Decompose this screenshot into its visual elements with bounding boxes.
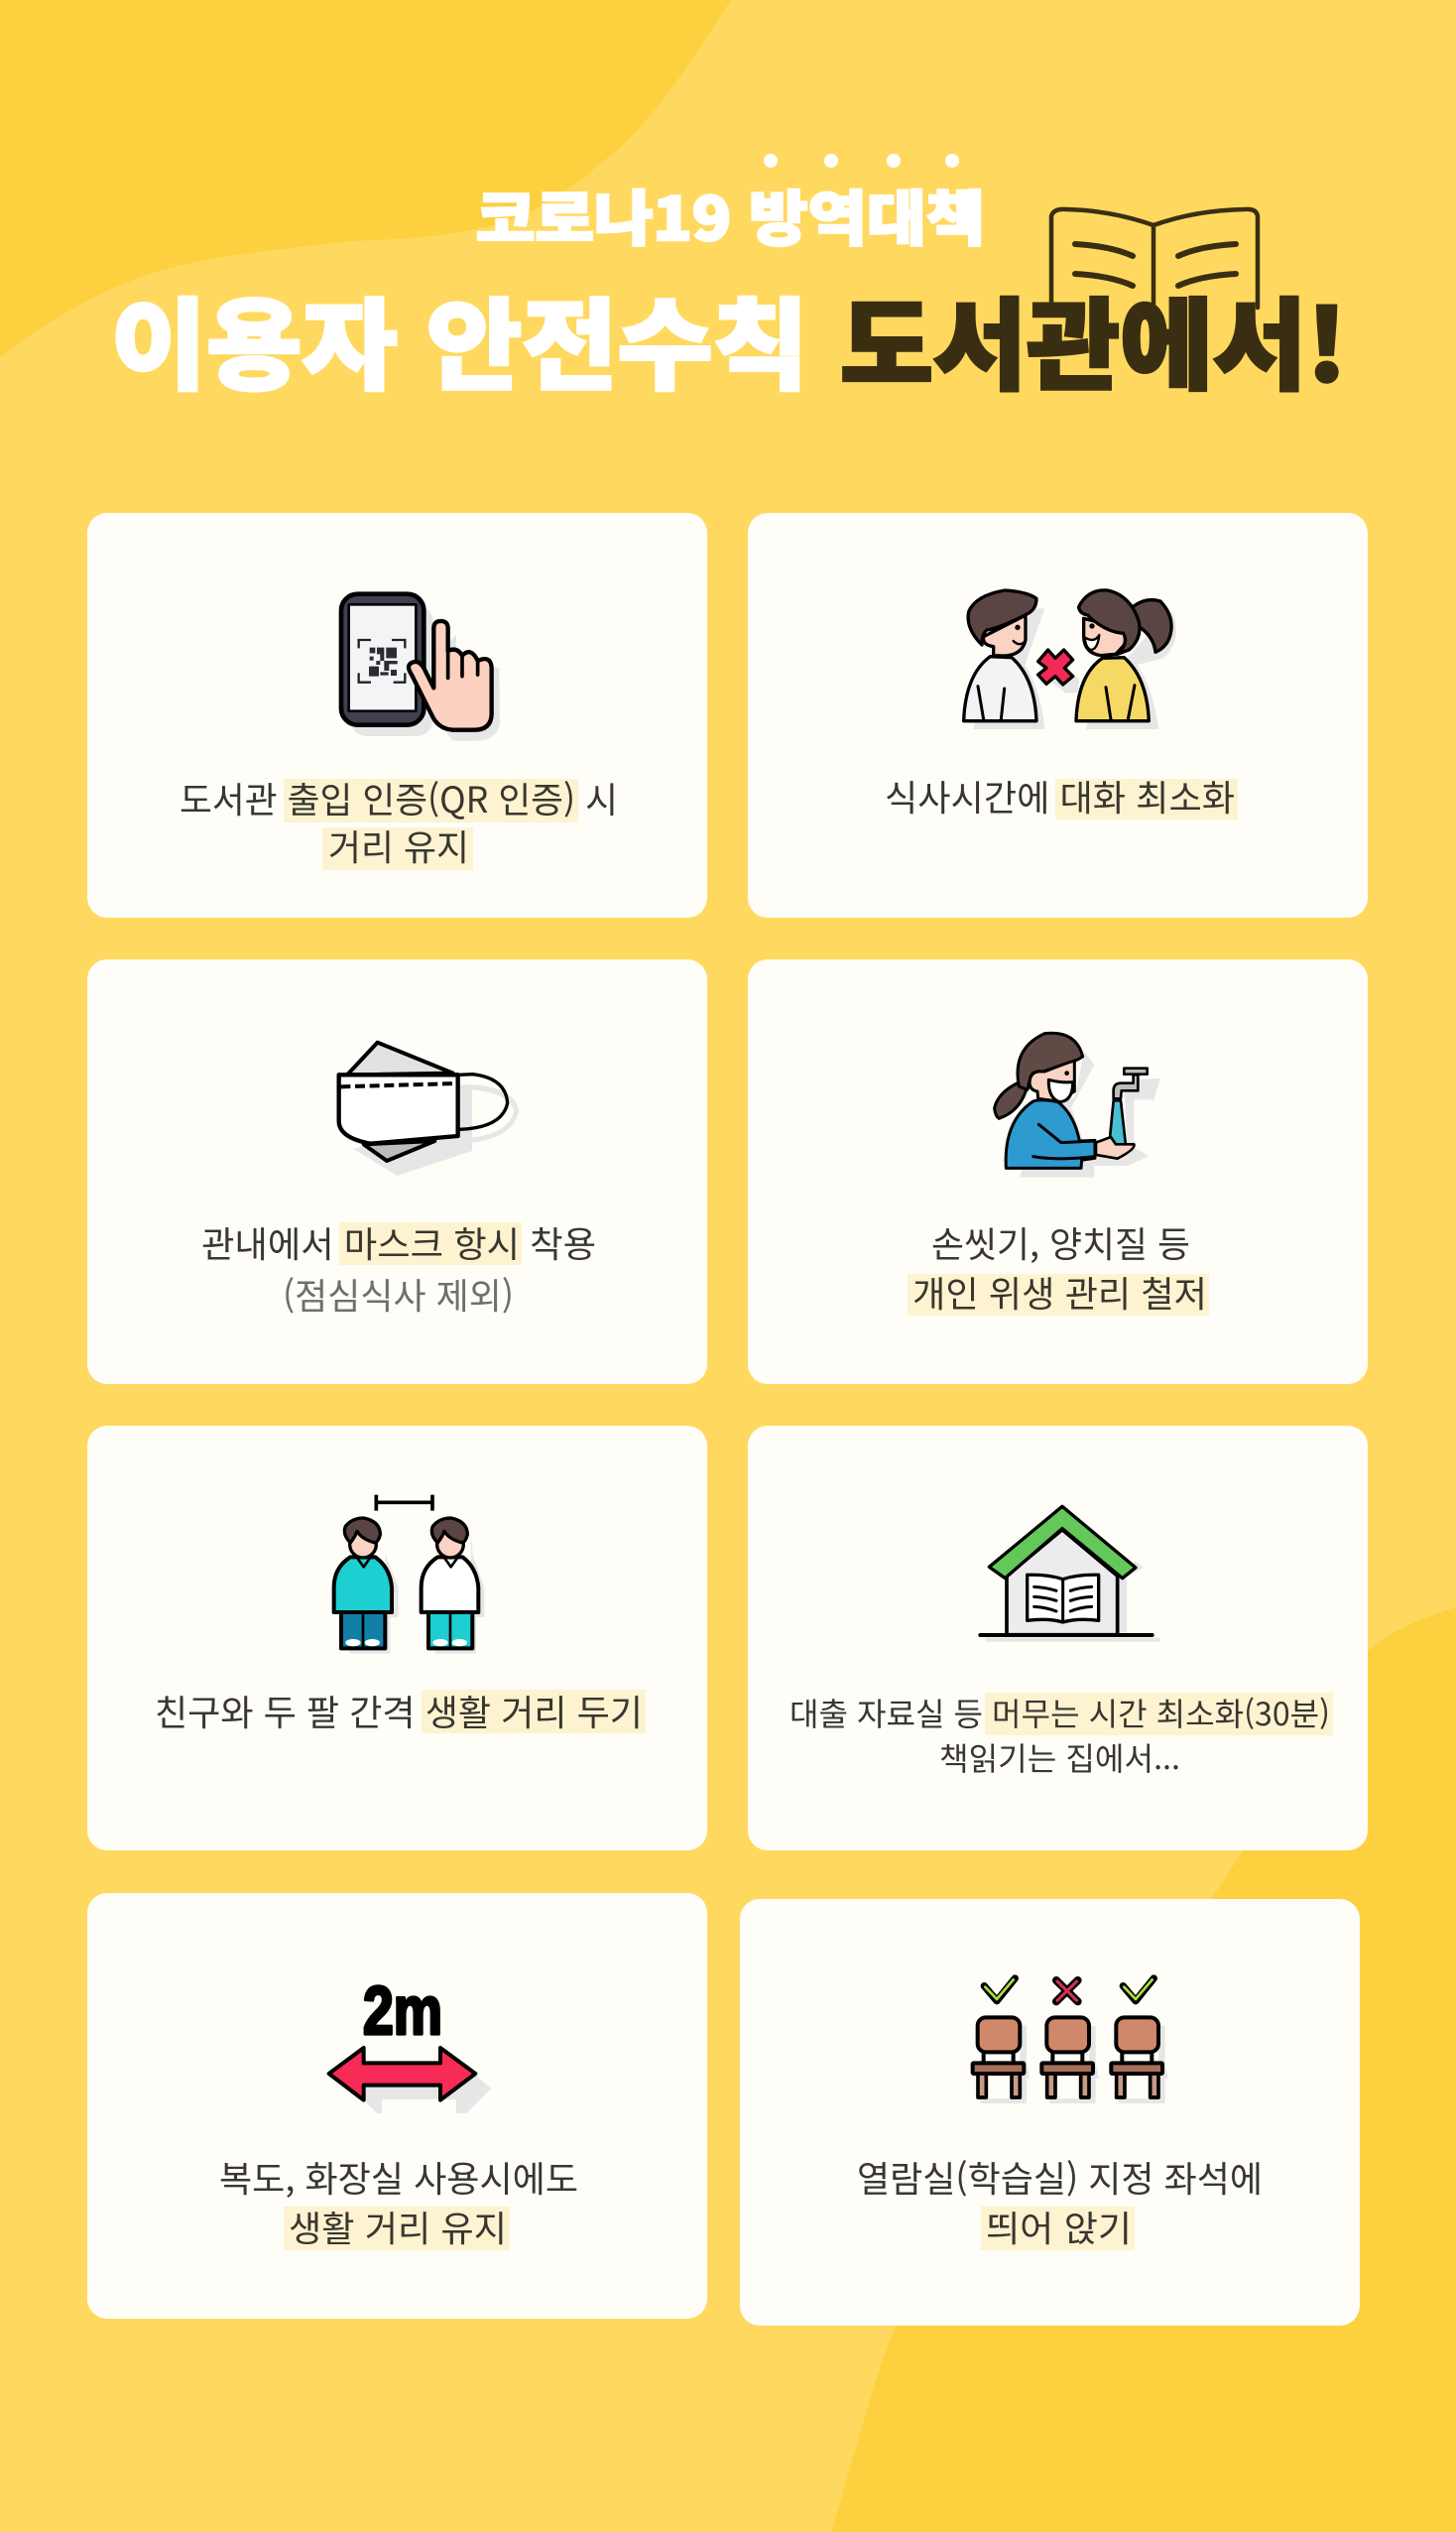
- icon: house with book: [980, 1506, 1160, 1642]
- text: stay time instruction: 대출 자료실 등 머무는 시간 최소화(30분): [789, 1690, 1330, 1735]
- icon: 2m arrow: [329, 1973, 491, 2113]
- decorative dots above title: [764, 154, 959, 168]
- icon: open book behind title: [1051, 209, 1258, 308]
- text: distance instruction: 친구와 두 팔 간격 생활 거리 두기: [155, 1685, 643, 1736]
- panel: assigned seats: [740, 1899, 1360, 2326]
- panel: no talking at meals: [748, 513, 1368, 918]
- icon: three chairs with marks: [973, 1978, 1168, 2103]
- icon: two people with red cross: [964, 590, 1176, 729]
- main title white: 이용자 안전수칙: [111, 266, 808, 410]
- panel: hand washing: [748, 959, 1368, 1384]
- panel: minimize stay time: [748, 1426, 1368, 1850]
- main title dark: 도서관에서!: [840, 266, 1347, 410]
- heading: title block: [111, 154, 1347, 410]
- text: mask instruction: [201, 1216, 596, 1320]
- icon: 2m arrow: 2m: [363, 1973, 442, 2049]
- panel: wear mask: [87, 959, 707, 1384]
- text: hygiene instruction: 손씻기, 양치질 등: [931, 1216, 1190, 1268]
- text: mask instruction: 관내에서 마스크 항시 착용: [201, 1216, 596, 1268]
- text: seat instruction: 열람실(학습실) 지정 좌석에: [857, 2151, 1263, 2203]
- icon: two people with distance bar: [334, 1495, 484, 1654]
- icon: phone QR with hand: [341, 594, 500, 741]
- icon: masked person washing hands: [995, 1033, 1160, 1178]
- text: hygiene instruction: 개인 위생 관리 철저: [912, 1266, 1207, 1318]
- text: mask instruction: (점심식사 제외): [283, 1268, 514, 1320]
- text: corridor instruction: 생활 거리 유지: [289, 2201, 507, 2252]
- icon: face mask: [339, 1043, 519, 1176]
- panel: 2m distance: [87, 1893, 707, 2319]
- panel: QR check-in: [87, 513, 707, 918]
- text: QR instruction: 도서관 출입 인증(QR 인증) 시: [180, 772, 618, 823]
- text: hygiene instruction: [908, 1216, 1209, 1318]
- text: meal instruction: 식사시간에 대화 최소화: [885, 770, 1235, 822]
- text: corridor instruction: 복도, 화장실 사용시에도: [219, 2151, 578, 2203]
- subtitle: 코로나19 방역대책: [476, 172, 985, 258]
- text: corridor instruction: [219, 2151, 578, 2252]
- panel: keep distance: [87, 1426, 707, 1850]
- text: QR instruction: 거리 유지: [328, 820, 469, 871]
- text: stay time instruction: [789, 1690, 1333, 1780]
- text: QR instruction: [180, 772, 618, 871]
- text: stay time instruction: 책읽기는 집에서...: [939, 1734, 1180, 1780]
- text: seat instruction: [857, 2151, 1263, 2252]
- text: seat instruction: 띄어 앉기: [986, 2201, 1132, 2252]
